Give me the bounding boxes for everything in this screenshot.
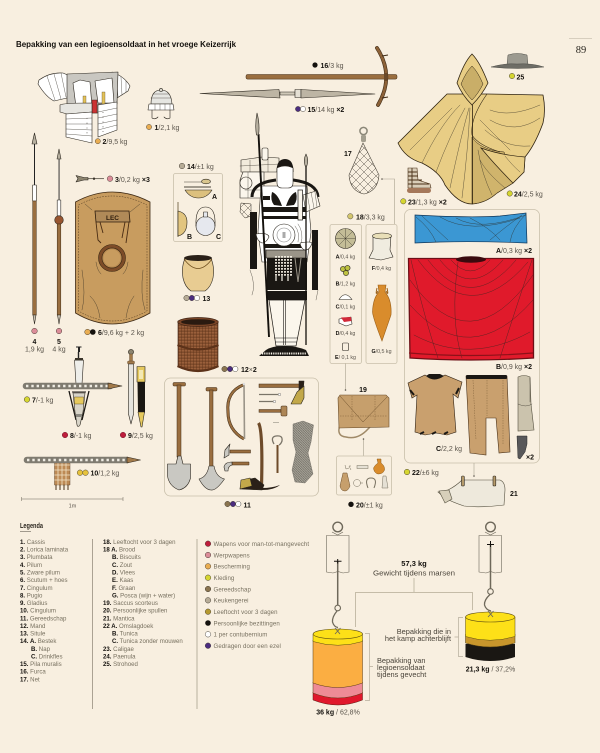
legend column 2: 18. Leeftocht voor 3 dagen [103,539,176,546]
panel 18 left column: food [330,224,362,364]
label 22 [404,469,439,477]
tool: spade [168,382,190,490]
item 21: mantica [438,476,505,507]
legend column 2: C. Tunica zonder mouwen [112,638,183,645]
legend column 3: colour key: Leeftocht voor 3 dagen [214,609,278,616]
connector clothing to mantica [473,463,475,477]
legend column 3: colour key: Werpwapens [214,552,250,559]
legend column 3: colour key: Keukengerei [214,598,249,605]
text right weight [385,627,451,643]
total weight label: Gewicht tijdens marsen [373,568,455,578]
item 23: caligae [407,168,431,193]
right stack: yellow layer [466,617,515,640]
18F sack [369,233,393,260]
legend column 1: 8. Pugio [20,592,43,599]
18G amphora [372,285,391,341]
18C label: C/0,1 kg [336,304,355,310]
legend column 1: 11. Gereedschap [20,615,67,622]
label left weight: 36 kg / 62,8% [316,710,360,716]
label 11: 11 [244,502,251,510]
item 2: lorica segmentata armour [38,72,130,143]
page number [569,38,592,56]
scale bar: 1m [69,504,77,510]
22C trousers [466,375,510,455]
22C rolled cloth [518,376,534,431]
panel 20: personal belongings [336,456,392,495]
22B red cloth [408,256,534,360]
item 25: straw hat [491,54,544,68]
legend column 2: B. Biscuits [112,554,141,561]
legend column 1: 2. Lorica laminata [20,547,69,554]
22C tunic [408,374,462,435]
label 7 [24,397,54,404]
legend heading: Legenda [20,521,44,530]
item 15: pila muralis [200,90,375,98]
item 13: situla [182,255,214,291]
legend column 2 [103,539,183,668]
label 16: 16/3 kg [320,63,344,70]
legend column 2: 19. Saccus scorteus [103,600,158,607]
tool: pickaxe [199,388,224,490]
label 17: 17 [344,151,352,158]
label 5: 4 kg [52,346,66,354]
soldier body [250,180,320,356]
label 14 [179,163,214,171]
right scale with stacked weight [466,522,515,661]
legend column 3: colour key [205,541,309,650]
legend column 3: colour key: Gedragen door een ezel [214,643,281,650]
label 25: 25 [516,74,524,82]
label 3: 3/0,2 kg ×3 [115,177,150,184]
label 1: 1/2,1 kg [154,125,180,132]
right stack: brown layer [466,634,515,647]
label 9: 9/2,5 kg [128,433,153,440]
tool: hook [272,436,282,473]
legend column 1: 16. Furca [20,669,46,676]
panel 14: kitchen set [174,174,222,242]
item 24: paenula cloak [398,54,544,204]
title: Bepakking van een legioensoldaat in het vroege Keizerrijk [16,40,236,49]
panel 11: tools [164,378,318,496]
14A mess kit: A [212,194,217,201]
legend column 1: 14. A. Bestek [20,638,57,645]
label 18: 18/3,3 kg [356,214,385,222]
page number: 89 [576,45,586,56]
left stack: pink layer [313,682,362,698]
item 16: furca [246,48,397,105]
label right weight: 21,3 kg / 37,2% [466,666,515,674]
label 7: 7/-1 kg [32,398,54,404]
label 1 [146,124,180,132]
panel 22: clothing [404,210,540,463]
label 21: 21 [510,491,518,498]
tool: mallet [259,406,287,416]
legend column 1: 3. Plumbata [20,554,53,561]
18D meat [339,317,352,326]
soldier left spear [256,113,269,337]
item 8: pugio [69,391,89,426]
label 8: 8/-1 kg [70,433,92,440]
legend column 1: C. Drinkfles [31,654,62,660]
item 7: belt with pugio sword hilt [26,347,122,389]
label 16 [312,62,344,70]
soldier head [276,159,294,188]
text right weight: het kamp achterblijft [385,634,451,643]
legend column 2: 23. Caligae [103,646,134,653]
legend column 1: 12. Mand [20,623,45,630]
right stack: black layer [466,644,515,661]
legend column 2: F. Graan [112,585,135,592]
22B label: B/0,9 kg ×2 [496,364,532,371]
item 1: helmet [148,88,174,119]
label 24: 24/2,5 kg [514,192,543,198]
text left weight [377,656,426,679]
total weight label: 57,3 kg [401,559,427,568]
legend column 1: 7. Cingulum [20,585,53,592]
label 4: 1,9 kg [25,346,44,354]
text right weight: Bepakking die in [397,627,451,636]
label 20 [348,502,383,510]
label 19: 19 [359,387,367,394]
18G label: G/0,5 kg [371,349,392,355]
scale bar [22,497,123,510]
18E cheese jar [342,343,348,350]
tool: bow saw [228,383,245,439]
label 12 [222,366,257,374]
left stack: red layer [313,692,362,705]
legend column 1: 17. Net [20,676,40,683]
tool: long crowbar sickle [240,422,280,490]
legend column 3: colour key: Gereedschap [214,586,251,593]
item 12: basket [178,318,218,372]
18C salt [339,295,352,300]
label 5 [52,328,66,354]
label 2: 2/9,5 kg [102,139,128,146]
legend column 2: 21. Mantica [103,615,135,622]
label 15: 15/14 kg ×2 [308,107,344,114]
item 19: saccus [338,395,389,438]
label 5: 5 [57,339,61,346]
18E label: E/ 0,1 kg [335,355,356,361]
22C label: C/2,2 kg [436,446,462,453]
connector between scales [356,578,472,627]
text left weight: tijdens gevecht [377,670,426,679]
label 13: 13 [202,296,210,303]
label 23: 23/1,3 kg ×2 [408,200,447,206]
tool: rope [292,421,314,483]
18D label: D/0,4 kg [336,331,355,337]
label 6: 6/9,6 kg + 2 kg [98,330,144,337]
item 6: scutum with cover [76,192,150,324]
22A blue cloth [415,213,527,243]
legend column 3: colour key: Kleding [214,575,234,582]
legend column 1: 4. Pilum [20,562,42,569]
legend column 1: 10. Cingulum [20,608,56,615]
legend column 2: B. Tunica [112,631,138,638]
label 9 [120,432,153,440]
legend column 1: 1. Cassis [20,539,45,546]
label 10: 10/1,2 kg [90,470,119,478]
bracket right weight [454,618,463,656]
22A label: A/0,3 kg ×2 [496,248,532,255]
connector net to food [381,178,394,224]
label 4: 4 [33,339,37,346]
legend column 1: 15. Pila muralis [20,661,62,668]
item 9: gladius [128,349,145,427]
legend column 2: 20. Persoonlijke spullen [103,608,167,615]
item 3: plumbata dart [76,176,104,182]
legend column 3: colour key: Wapens voor man-tot-mangevecht [214,541,309,548]
18A bread [336,228,356,248]
text left weight: Bepakking van [377,656,425,665]
item 4: pilum [32,133,37,324]
legend column 2: G. Posca (wijn + water) [112,592,175,599]
soldier pack [240,148,280,218]
total weight label [373,559,455,578]
legend column 1: 5. Zware pilum [20,570,60,576]
tool: hatchet with cloth [259,381,304,404]
legend column 3: colour key: Bescherming [214,564,250,571]
label 6 [85,329,144,337]
legend column 1: B. Nap [31,646,51,653]
label 11 [225,501,251,510]
label 22: 22/±6 kg [412,470,439,477]
legend column 1: 6. Scutum + hoes [20,577,68,584]
item 17: net [349,127,379,194]
bracket left weight [365,634,373,700]
left stack: yellow layer [313,634,362,645]
legend column 2: 24. Paenula [103,654,136,660]
legend heading [20,521,44,532]
label 15 [295,106,344,114]
legend column 2: D. Vlees [112,570,135,576]
18F label: F/0,4 kg [372,266,391,272]
legend column 1: 13. Situle [20,631,46,638]
label 18 [348,214,385,222]
label 13 [184,295,210,303]
legend column 2: 22 A. Omslagdoek [103,623,154,630]
legend column 2: 25. Strohoed [103,661,138,668]
label 20: 20/±1 kg [356,502,383,510]
soldier right spear [304,154,308,345]
label 10 [77,470,119,478]
panel 18 right column: grain and posca [366,224,397,364]
item 10: belt with apron [27,457,140,490]
legend column 2: C. Zout [112,562,132,569]
text left weight: legioensoldaat [377,663,425,672]
soldier figure [240,113,320,356]
left scale with stacked weight [313,522,362,705]
label 12: 12×2 [241,367,257,374]
18B biscuits [340,265,350,276]
legend column 2: 18 A. Brood [103,547,135,554]
left stack: orange layer [313,640,362,688]
label 14: 14/±1 kg [187,164,214,171]
14B bread pan: B [187,234,192,241]
item 6: scutum with cover: LEC [106,215,119,222]
item 5: heavy pilum [55,149,63,324]
label 25 [509,73,524,82]
18B label: B/1,2 kg [336,282,355,288]
connector food to sack [345,364,346,391]
legend column 2: E. Kaas [112,577,133,584]
label 4 [25,328,44,354]
legend column 1: 9. Gladius [20,600,47,607]
legend column 3: colour key: 1 per contubernium [214,632,267,639]
22C sock [517,436,527,459]
connector items to sack [363,438,364,456]
18A label: A/0,4 kg [336,254,355,260]
legend column 1 [20,539,69,683]
14C water bottle: C [216,234,221,241]
label 8 [62,432,92,440]
tool: small pegs [259,393,281,403]
tool: hammer axes [224,444,250,471]
legend column 3: colour key: Persoonlijke bezittingen [214,620,280,627]
22C sock multiplier: ×2 [526,454,534,462]
